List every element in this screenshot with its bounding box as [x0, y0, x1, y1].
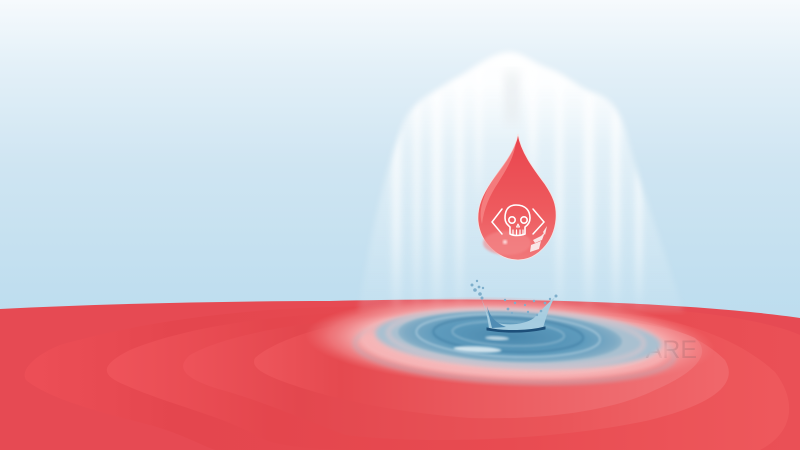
splash crown: [470, 280, 558, 332]
red liquid surface: [0, 300, 800, 450]
drop body: [478, 134, 556, 260]
background sky gradient: [0, 0, 800, 330]
ripple contours on red surface: [25, 305, 800, 450]
red drop with icon: [478, 134, 556, 260]
drop bottom sheen: [483, 231, 531, 255]
water fountain curtain: [358, 51, 683, 312]
icon: broken bone: [530, 226, 547, 252]
ripple pool: [353, 303, 676, 389]
grey shading at fountain top: [506, 74, 518, 114]
drop highlight left edge: [481, 142, 516, 224]
faint ghost letters: ARE: [646, 336, 697, 364]
icon: skull: [505, 205, 530, 236]
pale halo around ripple pool: [304, 290, 716, 394]
icon: code brackets: [492, 209, 544, 234]
